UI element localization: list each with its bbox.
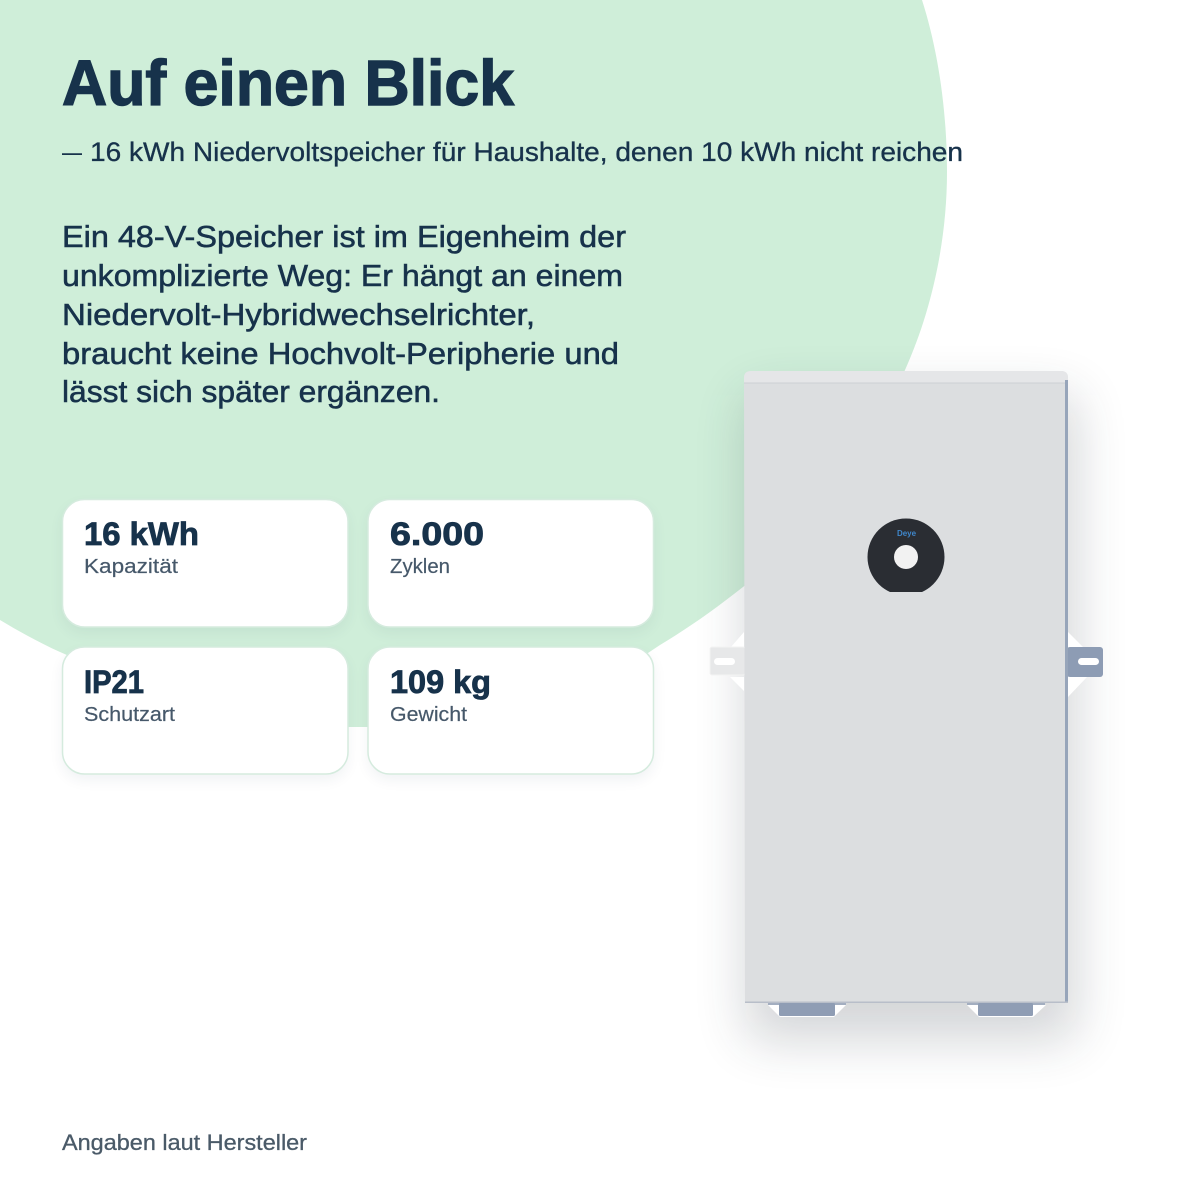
stat card: Schutzart: Schutzart: [84, 703, 175, 726]
stat card: Schutzart: IP21: [84, 664, 144, 700]
stat card: Gewicht: Gewicht: [390, 703, 467, 726]
control badge: [868, 518, 944, 596]
intro text block: Ein 48-V-Speicher ist im Eigenheim der: [62, 219, 626, 254]
intro text block: braucht keine Hochvolt-Peripherie und: [62, 336, 619, 371]
stat card: Zyklen: 6.000: [390, 516, 484, 552]
left wall bracket: [710, 647, 745, 675]
control badge: Deye: [897, 529, 917, 538]
title: Auf einen Blick: [62, 47, 514, 119]
intro text block: unkomplizierte Weg: Er hängt an einem: [62, 258, 623, 293]
stat card: Kapazität: Kapazität: [84, 555, 178, 578]
white cut-out halos around mounts: [730, 632, 1087, 1017]
left foot: [768, 1002, 846, 1016]
footnote: Angaben laut Hersteller: [62, 1130, 307, 1155]
stat card: Kapazität: [62, 500, 348, 633]
stat card: Kapazität: 16 kWh: [84, 516, 199, 552]
subtitle: —: [62, 137, 82, 167]
stat card: Gewicht: [368, 647, 654, 780]
stat card: Zyklen: Zyklen: [390, 555, 450, 578]
right foot: [967, 1002, 1045, 1016]
background green circle: [0, 0, 947, 727]
stat card: Gewicht: 109 kg: [390, 664, 491, 700]
stat card: Zyklen: [368, 500, 654, 633]
device body: [744, 371, 1068, 1003]
right wall bracket: [1067, 647, 1103, 677]
intro text block: Niedervolt-Hybridwechselrichter,: [62, 297, 535, 332]
intro text block: lässt sich später ergänzen.: [62, 374, 440, 409]
intro text block: [62, 219, 626, 409]
subtitle: 16 kWh Niedervoltspeicher für Haushalte, denen 10 kWh nicht reichen: [90, 137, 963, 167]
device shadow: [746, 395, 1076, 1040]
battery storage unit: [710, 371, 1103, 1040]
stat card: Schutzart: [62, 647, 348, 780]
